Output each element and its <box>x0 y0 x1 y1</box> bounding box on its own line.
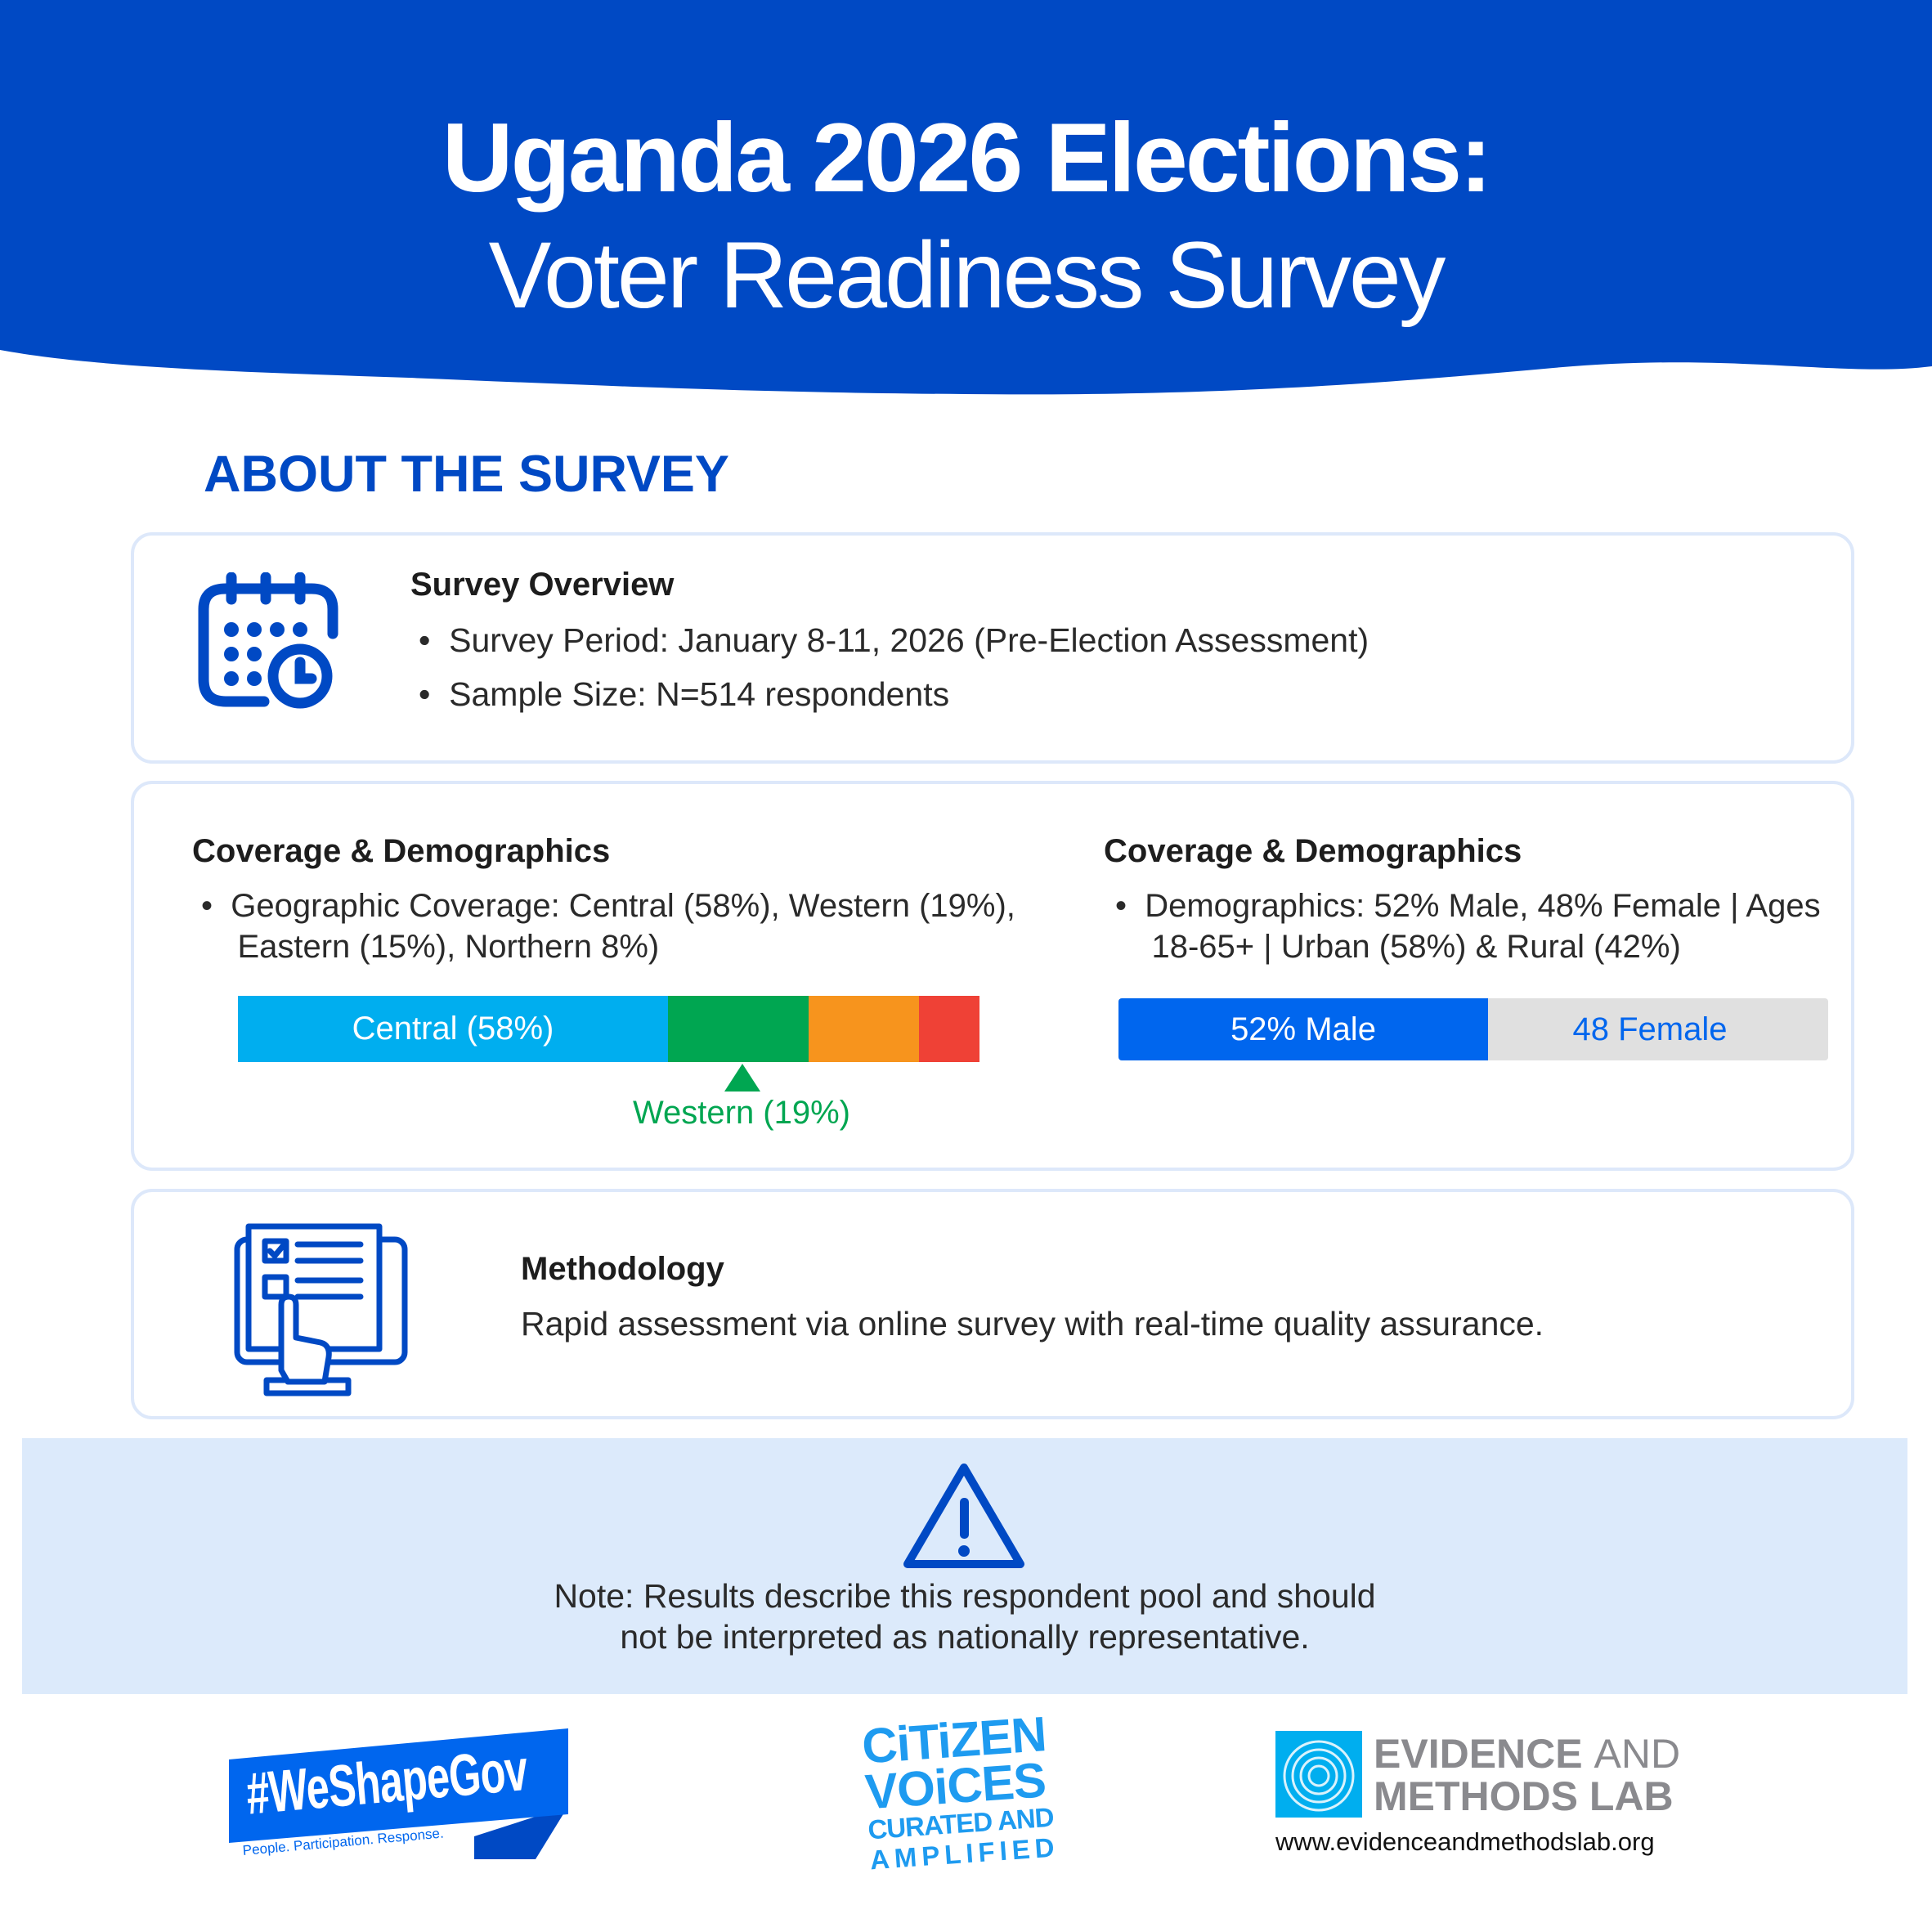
section heading: ABOUT THE SURVEY <box>204 446 729 503</box>
logo: Evidence and Methods Lab <box>1275 1731 1680 1856</box>
logo: Citizen Voices <box>860 1706 1060 1875</box>
logo: Citizen Voices: CiTiZEN <box>860 1706 1047 1774</box>
icon: calendar <box>198 572 338 708</box>
bullet left <box>201 888 1015 965</box>
text: note <box>554 1577 1376 1656</box>
bullet 1: • Survey Period: January 8-11, 2026 (Pre-Election Assessment) <box>419 621 1369 659</box>
logo: Citizen Voices: VOiCES <box>863 1752 1047 1819</box>
bullet right: 18-65+ | Urban (58%) & Rural (42%) <box>1151 929 1681 965</box>
bullet left: Eastern (15%), Northern 8%) <box>237 929 659 965</box>
panel: survey overview <box>131 532 1854 764</box>
heading right: Coverage & Demographics <box>1104 833 1522 869</box>
logo: Evidence and Methods Lab: METHODS LAB <box>1374 1773 1674 1819</box>
title: Uganda 2026 Elections: <box>442 103 1490 213</box>
logo: Evidence and Methods Lab: EVIDENCE AND <box>1374 1731 1680 1777</box>
bullet 2: • Sample Size: N=514 respondents <box>419 675 949 713</box>
bar chart: gender: 52% Male <box>1230 1011 1376 1047</box>
callout: western: Western (19%) <box>633 1095 850 1131</box>
panel: coverage & demographics <box>131 781 1854 1171</box>
heading left: Coverage & Demographics <box>192 833 610 869</box>
header banner <box>0 0 1932 394</box>
icon: online survey <box>234 1223 407 1396</box>
logo: WeShapeGov: #WeShapeGov <box>244 1737 530 1827</box>
bullet left: • Geographic Coverage: Central (58%), Western (19%), <box>201 888 1015 924</box>
heading: survey overview: Survey Overview <box>410 567 674 603</box>
text: note: not be interpreted as nationally representative. <box>620 1618 1310 1656</box>
bar chart: regions <box>238 996 979 1062</box>
logo: Evidence and Methods Lab: www.evidenceandmethodslab.org <box>1275 1827 1655 1856</box>
logo: WeShapeGov: People. Participation. Response. <box>242 1826 444 1858</box>
bullet right <box>1115 888 1821 965</box>
callout: western <box>633 1064 850 1131</box>
panel: methodology <box>131 1189 1854 1419</box>
bullet right: • Demographics: 52% Male, 48% Female | Ages <box>1115 888 1821 924</box>
icon: warning <box>903 1464 1024 1568</box>
logo: Citizen Voices: CURATED AND <box>867 1802 1055 1845</box>
logo: Citizen Voices: AMPLIFIED <box>869 1831 1060 1875</box>
heading: methodology: Methodology <box>521 1251 724 1287</box>
logo: WeShapeGov <box>229 1728 568 1859</box>
bar chart: gender: 48 Female <box>1573 1011 1727 1047</box>
callout: note <box>22 1438 1907 1694</box>
bar chart: gender <box>1118 998 1828 1060</box>
text: note: Note: Results describe this respondent pool and should <box>554 1577 1376 1615</box>
text: methodology: Rapid assessment via online survey with real-time quality assurance. <box>521 1305 1544 1343</box>
bar chart: regions: Central (58%) <box>352 1011 554 1047</box>
subtitle: Voter Readiness Survey <box>489 223 1443 328</box>
